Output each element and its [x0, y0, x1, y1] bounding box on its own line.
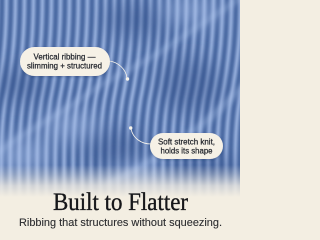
light shading patches	[0, 0, 220, 187]
diagonal fold highlight	[0, 0, 245, 155]
callout: vertical ribbing: Vertical ribbing —	[34, 52, 96, 62]
bottom cream fade	[0, 165, 240, 197]
connector: ribbing callout	[109, 61, 129, 81]
subtitle: Ribbing that structures without squeezing.	[19, 217, 222, 229]
callout: soft stretch knit: Soft stretch knit,	[158, 138, 215, 146]
infographic canvas	[0, 0, 240, 229]
callout: vertical ribbing	[20, 47, 110, 76]
dark shading patches	[0, 2, 241, 184]
callout: soft stretch knit: holds its shape	[160, 146, 212, 156]
callout: soft stretch knit	[150, 133, 223, 159]
connector: knit callout	[129, 126, 151, 144]
lower fold highlight	[105, 85, 245, 185]
callout: vertical ribbing: slimming + structured	[27, 62, 102, 70]
light ribs	[0, 0, 250, 200]
title: Built to Flatter	[53, 189, 189, 216]
fabric background	[0, 0, 254, 240]
dark ribs	[0, 0, 254, 200]
